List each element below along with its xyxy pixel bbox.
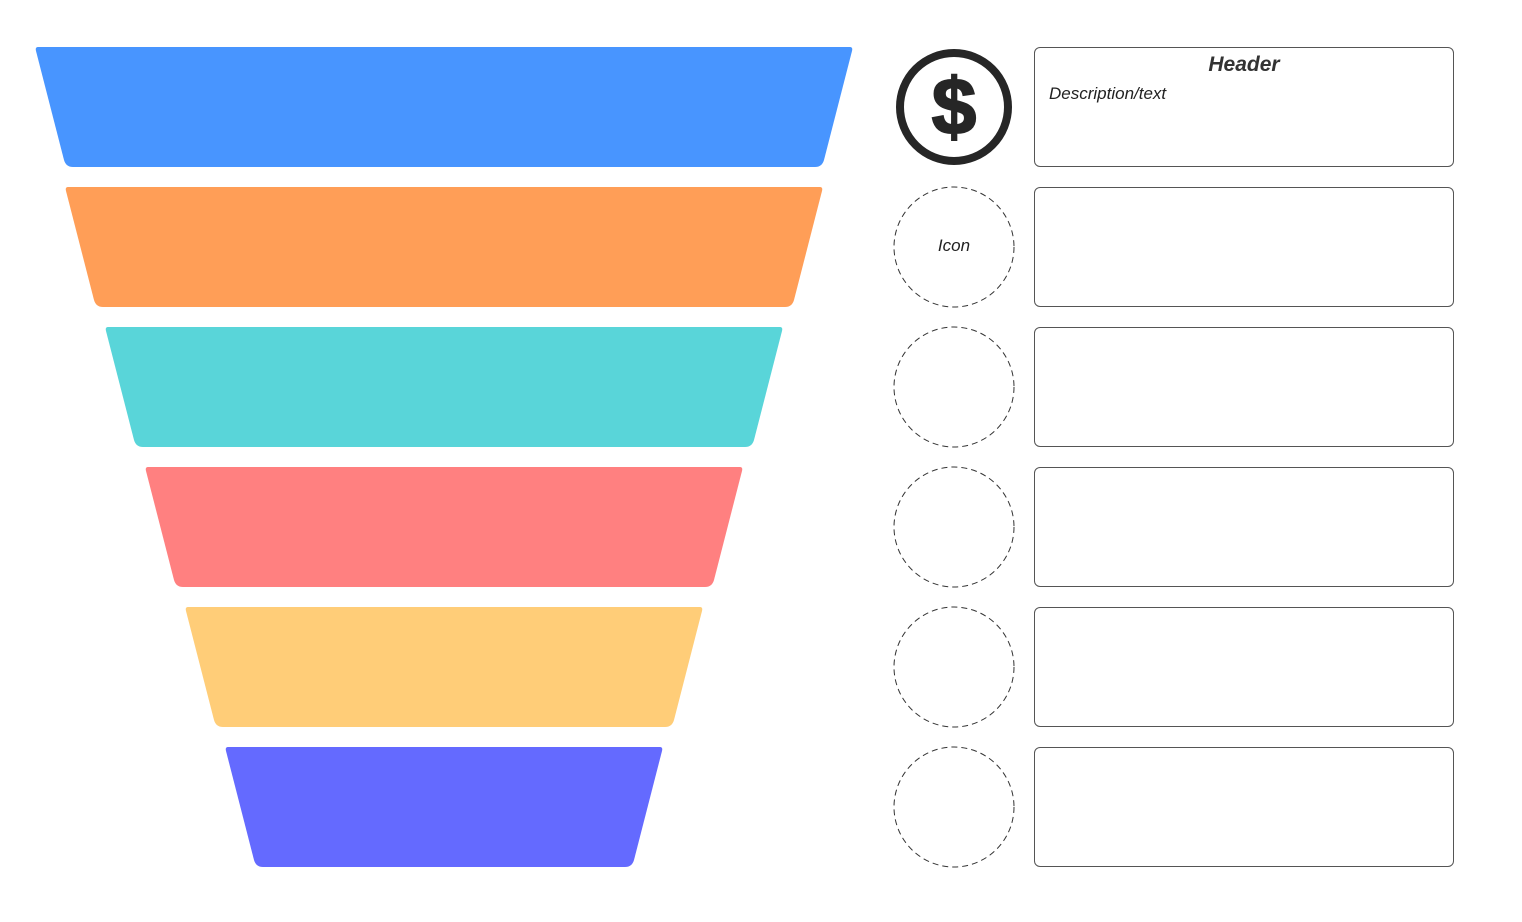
funnel tier 6 bbox=[226, 747, 662, 867]
funnel tier 5 bbox=[186, 607, 702, 727]
icon placeholder 2: Icon bbox=[938, 236, 970, 255]
funnel tier 1 bbox=[36, 47, 852, 167]
text box 1 bbox=[1034, 47, 1454, 167]
icon placeholder 6 bbox=[894, 747, 1014, 867]
header: Header bbox=[1208, 53, 1280, 76]
text box 5 bbox=[1034, 607, 1454, 727]
funnel tier 2 bbox=[66, 187, 822, 307]
text box 6 bbox=[1034, 747, 1454, 867]
text box 2 bbox=[1034, 187, 1454, 307]
icon placeholder 3 bbox=[894, 327, 1014, 447]
text box 4 bbox=[1034, 467, 1454, 587]
text box 3 bbox=[1034, 327, 1454, 447]
description: Description/text bbox=[1049, 84, 1166, 103]
icon: dollar bbox=[900, 53, 1008, 161]
icon placeholder 5 bbox=[894, 607, 1014, 727]
icon placeholder 2 bbox=[894, 187, 1014, 307]
icon placeholder 4 bbox=[894, 467, 1014, 587]
icon: dollar: $ bbox=[932, 62, 976, 151]
funnel tier 3 bbox=[106, 327, 782, 447]
funnel tier 4 bbox=[146, 467, 742, 587]
